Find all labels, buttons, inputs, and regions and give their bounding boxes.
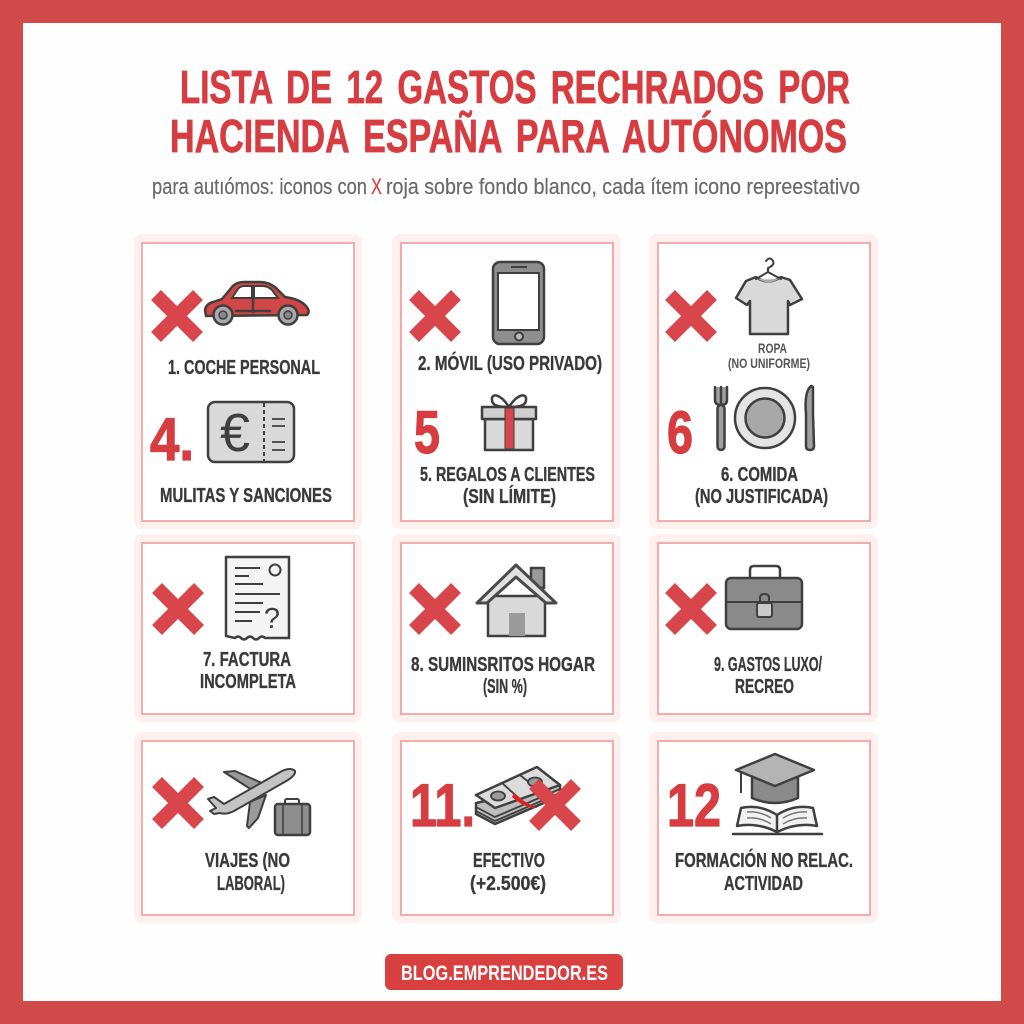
label: coche personal: 1. COCHE PERSONAL xyxy=(168,357,320,379)
label: efectivo: EFECTIVO xyxy=(473,850,545,872)
icon: plate and cutlery xyxy=(715,386,814,450)
label: regalos xyxy=(420,464,595,508)
label: regalos: (SIN LÍMITE) xyxy=(463,485,556,508)
label: ropa xyxy=(728,340,810,371)
label: formacion: ACTIVIDAD xyxy=(724,873,803,895)
label: suministros hogar xyxy=(411,654,595,698)
icon: euro ticket: € xyxy=(220,403,250,463)
icon: red X xyxy=(157,782,199,824)
label: factura incompleta: 7. FACTURA xyxy=(203,649,291,671)
label: factura incompleta: INCOMPLETA xyxy=(200,671,296,693)
title xyxy=(170,61,850,162)
icon: airplane and suitcase xyxy=(208,769,310,835)
label: viajes: LABORAL) xyxy=(217,873,285,895)
icon: euro ticket xyxy=(208,402,294,463)
panel: ropa and comida xyxy=(649,234,878,529)
number 6: 6 xyxy=(667,399,693,466)
label: movil: 2. MÓVIL (USO PRIVADO) xyxy=(418,351,602,375)
panel: suministros hogar xyxy=(392,534,621,722)
footer badge xyxy=(385,954,623,990)
icon: red X xyxy=(156,295,198,337)
label: multas y sanciones: MULITAS Y SANCIONES xyxy=(160,485,332,507)
label: formacion xyxy=(675,848,853,895)
icon: red X xyxy=(157,588,199,630)
icon: gift xyxy=(482,395,536,450)
subtitle xyxy=(152,174,860,199)
icon: smartphone xyxy=(493,262,544,344)
number 5: 5 xyxy=(414,399,440,466)
icon: house xyxy=(477,565,556,636)
icon: graduation cap and book xyxy=(733,754,822,834)
panel: formacion xyxy=(649,732,878,923)
icon: red X xyxy=(670,588,712,630)
label: efectivo: (+2.500€) xyxy=(470,873,546,895)
label: efectivo xyxy=(470,850,546,895)
label: factura incompleta xyxy=(200,649,296,693)
icon: car xyxy=(205,282,309,324)
icon: red X xyxy=(414,588,456,630)
label: ropa: (NO UNIFORME) xyxy=(728,355,810,371)
number 11: 11. xyxy=(410,772,475,839)
label: viajes: VIAJES (NO xyxy=(205,850,290,872)
panel: coche personal and multas xyxy=(134,234,362,529)
icon: shirt on hanger xyxy=(736,258,802,334)
label: comida: (NO JUSTIFICADA) xyxy=(695,486,828,508)
icon: red X xyxy=(534,784,576,826)
label: comida: 6. COMIDA xyxy=(721,464,798,486)
panel: efectivo xyxy=(392,732,621,923)
label: ropa: ROPA xyxy=(758,340,787,356)
number 12: 12 xyxy=(667,772,721,839)
label: gastos lujo xyxy=(714,654,822,698)
icon: briefcase xyxy=(726,566,802,629)
subtitle: X xyxy=(371,174,382,199)
icon: receipt xyxy=(226,557,289,640)
icon: red X xyxy=(414,295,456,337)
label: formacion: FORMACIÓN NO RELAC. xyxy=(675,848,853,872)
label: suministros hogar: 8. SUMINSRITOS HOGAR xyxy=(411,654,595,676)
icon: banknotes xyxy=(476,767,560,824)
panel: gastos lujo xyxy=(649,534,878,722)
label: viajes xyxy=(205,850,290,895)
subtitle: roja sobre fondo blanco, cada ítem icono repreestativo xyxy=(386,174,860,199)
label: gastos lujo: RECREO xyxy=(735,676,794,698)
label: comida xyxy=(695,464,828,508)
number 4: 4. xyxy=(150,406,194,473)
panel: viajes xyxy=(134,732,362,923)
icon: red X xyxy=(670,295,712,337)
subtitle: para autıómos: iconos con xyxy=(152,174,367,199)
footer badge: BLOG.EMPRENDEDOR.ES xyxy=(401,962,608,985)
panel: factura incompleta xyxy=(134,534,362,722)
panel: movil and regalos xyxy=(392,234,621,529)
label: regalos: 5. REGALOS A CLIENTES xyxy=(420,464,595,486)
label: suministros hogar: (SIN %) xyxy=(483,676,527,698)
label: gastos lujo: 9. GASTOS LUXO/ xyxy=(714,654,822,676)
icon: receipt: ? xyxy=(264,603,280,635)
